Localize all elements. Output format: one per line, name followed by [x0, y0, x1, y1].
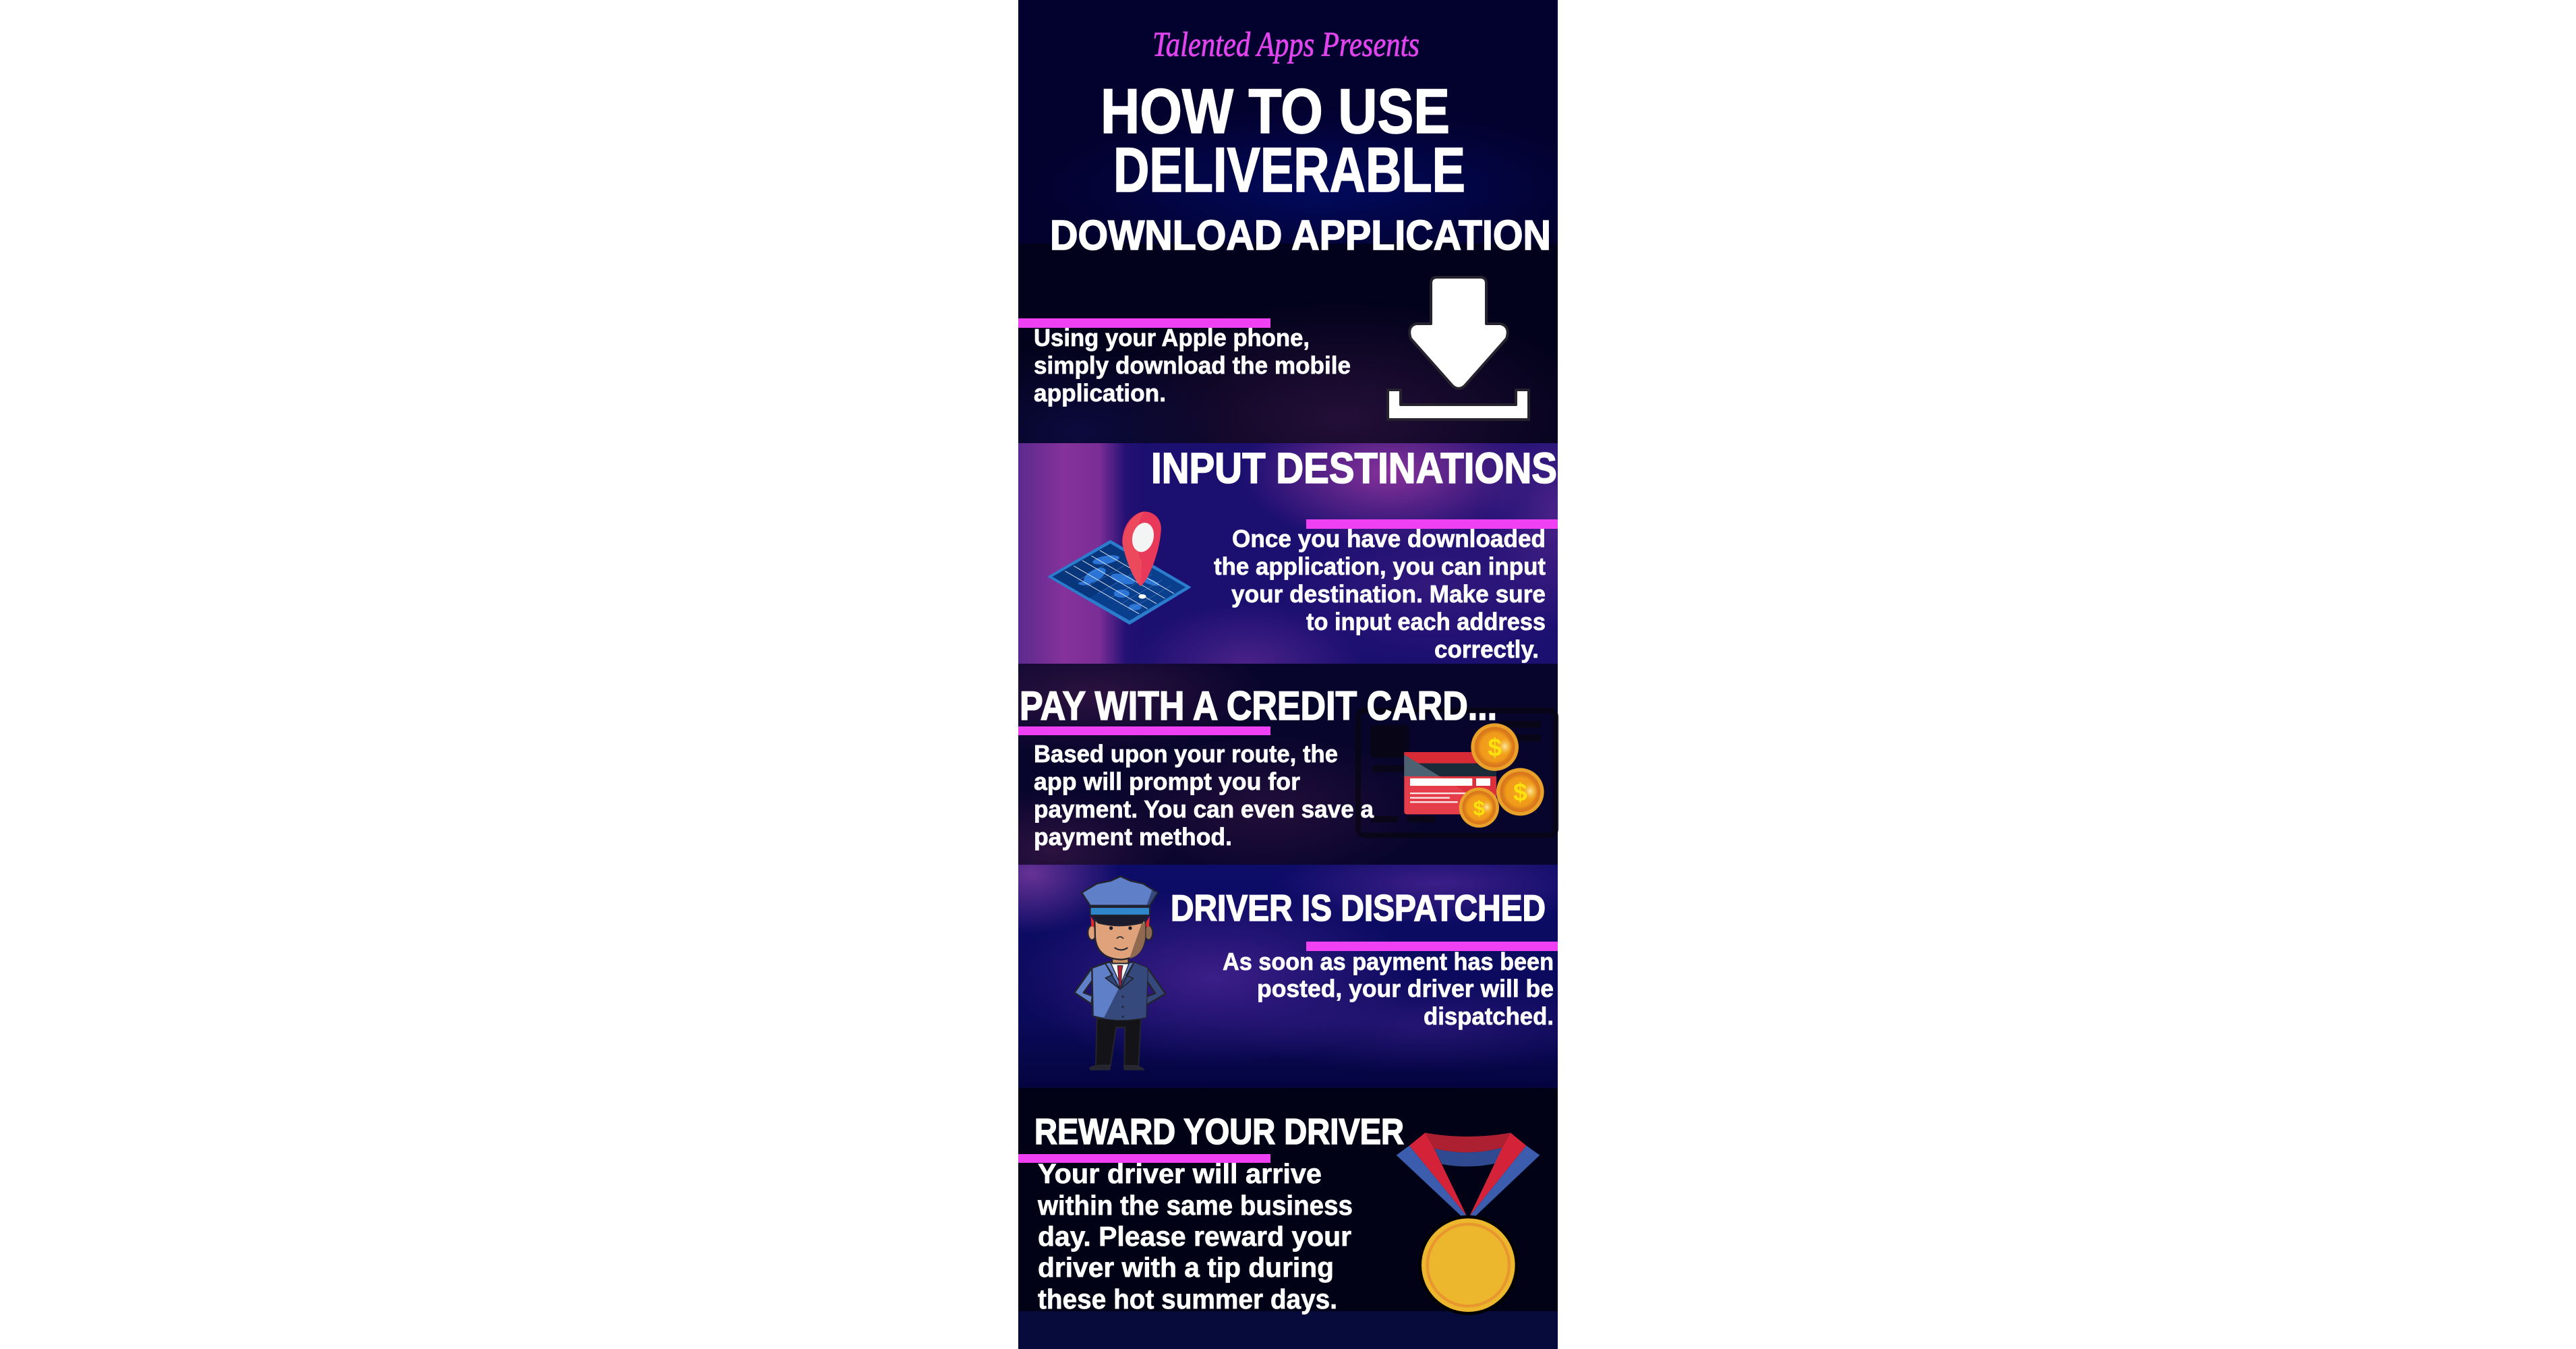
icon: driver character: [1074, 876, 1165, 1070]
body text: the application, you can input: [1214, 552, 1546, 580]
body text: dispatched.: [1424, 1002, 1554, 1030]
accent bar: [1018, 726, 1270, 735]
panel: download application: [1018, 220, 1558, 443]
body text: payment method.: [1034, 823, 1232, 851]
body text: to input each address: [1306, 608, 1546, 635]
heading: input destinations: INPUT DESTINATIONS: [1151, 444, 1557, 492]
heading: reward your driver: REWARD YOUR DRIVER: [1034, 1112, 1404, 1152]
title: DELIVERABLE: [1113, 134, 1465, 205]
heading: driver is dispatched: DRIVER IS DISPATCHED: [1171, 887, 1546, 929]
body text: these hot summer days.: [1038, 1284, 1337, 1315]
body text: simply download the mobile: [1034, 351, 1351, 379]
body text: As soon as payment has been: [1223, 948, 1554, 975]
strip: footer band: [1018, 1311, 1558, 1349]
icon: map with location pin: [1049, 511, 1190, 624]
body text: your destination. Make sure: [1231, 580, 1546, 608]
accent bar: [1018, 318, 1270, 328]
body text: [1223, 948, 1554, 1030]
accent bar: [1306, 519, 1558, 529]
body text: application.: [1034, 379, 1166, 407]
icon: credit card with coins: $: [1473, 797, 1485, 820]
body text: app will prompt you for: [1034, 768, 1300, 795]
heading: download application: DOWNLOAD APPLICATION: [1050, 212, 1551, 259]
accent bar: [1306, 942, 1558, 951]
title: [1101, 76, 1465, 205]
body text: posted, your driver will be: [1257, 975, 1554, 1002]
icon: gold medal: [1397, 1132, 1540, 1315]
body text: [1034, 740, 1374, 851]
heading: pay with a credit card: PAY WITH A CREDIT CARD...: [1020, 683, 1497, 728]
accent bar: [1018, 1154, 1270, 1163]
panel: input destinations: [1018, 443, 1558, 664]
icon: credit card with coins: $: [1488, 734, 1502, 762]
body text: [1034, 324, 1351, 407]
panel: header: [1018, 0, 1558, 243]
body text: Based upon your route, the: [1034, 740, 1338, 768]
title: HOW TO USE: [1101, 76, 1450, 146]
body text: Your driver will arrive: [1038, 1158, 1322, 1189]
panel: pay with a credit card: [1018, 664, 1559, 865]
icon: download arrow: [1388, 277, 1529, 420]
infographic canvas: [1018, 0, 1559, 1349]
body text: day. Please reward your: [1038, 1221, 1351, 1252]
body text: correctly.: [1434, 635, 1539, 663]
body text: [1037, 1158, 1353, 1315]
icon: credit card with coins: $: [1513, 778, 1527, 806]
presenter line: Talented Apps Presents: [1152, 26, 1419, 64]
panel: driver is dispatched: [1018, 865, 1558, 1088]
icon: credit card with coins: [1358, 710, 1556, 835]
body text: Once you have downloaded: [1232, 525, 1546, 552]
body text: [1214, 525, 1546, 663]
body text: Using your Apple phone,: [1034, 324, 1310, 351]
body text: within the same business: [1037, 1190, 1353, 1221]
body text: driver with a tip during: [1038, 1252, 1334, 1283]
panel: reward your driver: [1018, 1088, 1558, 1315]
body text: payment. You can even save a: [1034, 795, 1374, 823]
